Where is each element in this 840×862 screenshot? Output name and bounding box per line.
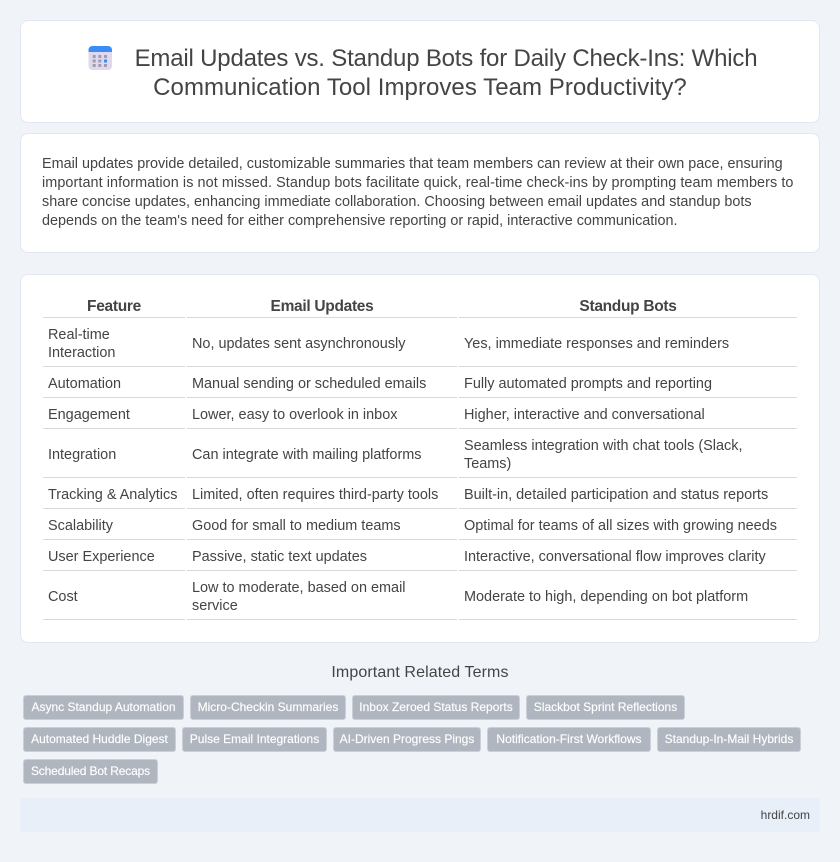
panel: title card <box>20 20 820 123</box>
text block: intro paragraph: important information is not missed. Standup bots facilitate quick, real-time check-ins by prompting team members to <box>42 175 794 191</box>
comparison table <box>43 298 797 620</box>
related term tags: Standup-In-Mail Hybrids <box>665 732 793 746</box>
comparison table: Built-in, detailed participation and status reports <box>464 487 768 503</box>
comparison table: Seamless integration with chat tools (Slack, <box>464 438 742 454</box>
text block: intro paragraph: depends on the team's need for either comprehensive reporting or rapid, interactive communication. <box>42 213 678 229</box>
comparison table: Tracking & Analytics <box>48 487 177 503</box>
related term tags: Scheduled Bot Recaps <box>31 764 150 778</box>
comparison table: Scalability <box>48 518 113 534</box>
comparison table: Engagement <box>48 407 130 423</box>
related term tags: Slackbot Sprint Reflections <box>534 700 677 714</box>
comparison table: Limited, often requires third-party tools <box>192 487 438 503</box>
comparison table: Cost <box>48 589 78 605</box>
related term tags: Inbox Zeroed Status Reports <box>359 700 513 714</box>
text block: intro paragraph <box>42 156 794 229</box>
comparison table: Teams) <box>464 456 511 472</box>
comparison table: Higher, interactive and conversational <box>464 407 705 423</box>
text block: intro paragraph: share concise updates, enhancing immediate collaboration. Choosing between email updates and standup bots <box>42 194 752 210</box>
related term tags <box>23 695 801 784</box>
footer credit: hrdif.com <box>761 808 810 822</box>
comparison table: Interaction <box>48 345 115 361</box>
footer <box>20 798 820 832</box>
comparison table: Real-time <box>48 327 110 343</box>
comparison table: No, updates sent asynchronously <box>192 336 405 352</box>
comparison table: Passive, static text updates <box>192 549 367 565</box>
panel: intro text card <box>20 133 820 253</box>
comparison table: User Experience <box>48 549 155 565</box>
table header: Standup Bots <box>579 298 677 315</box>
related term tags: Async Standup Automation <box>31 700 176 714</box>
comparison table: Moderate to high, depending on bot platform <box>464 589 748 605</box>
comparison table: Lower, easy to overlook in inbox <box>192 407 397 423</box>
table header: Feature <box>87 298 141 315</box>
comparison table: Can integrate with mailing platforms <box>192 447 422 463</box>
icon: calendar <box>88 46 112 70</box>
panel: comparison table card <box>20 274 820 643</box>
title <box>135 45 757 101</box>
comparison table: Yes, immediate responses and reminders <box>464 336 729 352</box>
comparison table: Automation <box>48 376 121 392</box>
related term tags: Notification-First Workflows <box>496 732 642 746</box>
related term tags: Automated Huddle Digest <box>31 732 168 746</box>
comparison table: Good for small to medium teams <box>192 518 401 534</box>
comparison table: Fully automated prompts and reporting <box>464 376 712 392</box>
heading: related terms: Important Related Terms <box>331 664 509 681</box>
related term tags: Pulse Email Integrations <box>190 732 319 746</box>
title: Communication Tool Improves Team Productivity? <box>153 74 687 101</box>
comparison table: Manual sending or scheduled emails <box>192 376 426 392</box>
table header <box>87 298 677 315</box>
comparison table: Low to moderate, based on email <box>192 580 405 596</box>
comparison table: Integration <box>48 447 116 463</box>
comparison table: Optimal for teams of all sizes with growing needs <box>464 518 777 534</box>
comparison table: Interactive, conversational flow improves clarity <box>464 549 766 565</box>
related term tags: Micro-Checkin Summaries <box>198 700 338 714</box>
related term tags: AI-Driven Progress Pings <box>340 732 474 746</box>
text block: intro paragraph: Email updates provide detailed, customizable summaries that team members can review at their own pace, ensuring <box>42 156 783 172</box>
title: Email Updates vs. Standup Bots for Daily Check-Ins: Which <box>135 45 757 72</box>
table header: Email Updates <box>271 298 373 315</box>
comparison table: service <box>192 598 238 614</box>
